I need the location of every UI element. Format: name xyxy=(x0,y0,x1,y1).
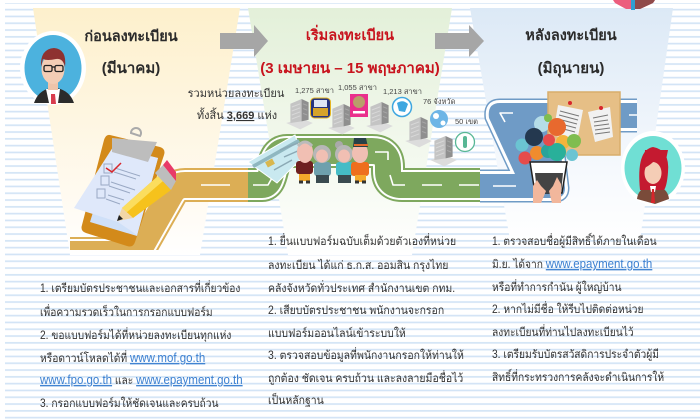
panel: before registration backdrop xyxy=(33,8,240,255)
panel: start registration backdrop xyxy=(248,8,452,255)
person 4 xyxy=(351,138,369,182)
logo: BAAC xyxy=(310,98,330,118)
text block: steps before registration: 1. เตรียมบัตรประชาชนและเอกสารที่เกี่ยวข้อง xyxy=(40,280,240,295)
heading: after registration xyxy=(525,27,617,78)
person 1 xyxy=(296,141,313,182)
text block: steps at start of registration: ลงทะเบียน ได้แก่ ธ.ก.ส. ออมสิน กรุงไทย xyxy=(268,259,448,272)
text block: steps after registration: ลงทะเบียนที่ท่านไปลงทะเบียนไว้ xyxy=(492,324,634,339)
logo: Bangkok xyxy=(456,132,474,152)
icon: man avatar xyxy=(20,31,86,105)
text block: steps after registration: 1. ตรวจสอบชื่อผู้มีสิทธิ์ได้ภายในเดือน xyxy=(492,232,657,248)
person 3 xyxy=(335,141,353,183)
text block: steps after registration: 2. หากไม่มีชื่อ ให้รีบไปติดต่อหน่วย xyxy=(492,301,643,316)
text block: steps after registration xyxy=(492,232,664,384)
text block: steps at start of registration xyxy=(268,232,464,407)
heading: start registration xyxy=(260,24,440,77)
panel: after registration backdrop xyxy=(470,8,673,240)
heading: after registration: (มิถุนายน) xyxy=(538,59,604,78)
text block: steps before registration: www.fpo.go.th และ www.epayment.go.th xyxy=(39,372,243,387)
text block: steps at start of registration: 3. ตรวจสอบข้อมูลที่พนักงานกรอกให้ท่านให้ xyxy=(268,346,464,362)
arrow: first stage to second xyxy=(220,25,268,57)
stat: total registration points: ทั้งสิ้น 3,669 แห่ง xyxy=(197,107,277,122)
text block: steps after registration: 3. เตรียมรับบัตรสวัสดิการประจำตัวผู้มี xyxy=(492,347,659,361)
text block: steps at start of registration: 2. เสียบบัตรประชาชน พนักงานจะกรอก xyxy=(268,304,444,317)
icon: ID card xyxy=(248,135,303,183)
buildings and agency logos xyxy=(286,83,478,166)
text block: steps after registration: หรือที่ทำการกำนัน ผู้ใหญ่บ้าน xyxy=(492,279,622,294)
text block: steps before registration: หรือดาวน์โหลดได้ที่ www.mof.go.th xyxy=(40,350,205,365)
buildings and agency logos: 76 จังหวัด xyxy=(423,97,456,106)
text block: steps at start of registration: ถูกต้อง ชัดเจน ครบถ้วน และลงลายมือชื่อไว้ xyxy=(268,369,463,385)
stat: total registration points xyxy=(188,87,285,122)
stat: total registration points: รวมหน่วยลงทะเบียน xyxy=(188,87,285,100)
decoration: top-right pink tab xyxy=(613,0,655,10)
buildings and agency logos: 50 เขต xyxy=(455,117,478,126)
text block: steps before registration: เพื่อความรวดเร็วในการกรอกแบบฟอร์ม xyxy=(40,304,213,319)
text block: steps after registration: สิทธิ์ที่กระทรวงการคลังจะดำเนินการให้ xyxy=(492,368,664,384)
icon: woman avatar xyxy=(621,131,685,205)
icon: clipboard and pencil xyxy=(74,128,176,246)
heading: start registration: (3 เมษายน – 15 พฤษภาคม) xyxy=(260,60,440,77)
icon: cork board with notes xyxy=(548,92,620,155)
logo: Krungthai xyxy=(392,98,412,116)
text block: steps after registration: มิ.ย. ได้จาก www.epayment.go.th xyxy=(492,256,652,271)
heading: before registration: ก่อนลงทะเบียน xyxy=(84,28,178,45)
heading: before registration: (มีนาคม) xyxy=(102,60,160,77)
text block: steps before registration xyxy=(39,280,243,410)
buildings and agency logos: 1,213 สาขา xyxy=(383,87,422,96)
logo: Government Savings Bank xyxy=(350,94,368,117)
text block: steps before registration: 2. ขอแบบฟอร์มได้ที่หน่วยลงทะเบียนทุกแห่ง xyxy=(40,327,231,342)
heading: before registration xyxy=(84,28,178,77)
buildings and agency logos: 1,275 สาขา xyxy=(295,86,334,95)
text block: steps at start of registration: คลังจังหวัดทั่วประเทศ สำนักงานเขต กทม. xyxy=(268,279,455,295)
icon: group of elderly people xyxy=(296,138,369,183)
text block: steps at start of registration: แบบฟอร์มออนไลน์เข้าระบบให้ xyxy=(268,327,406,340)
icon: laptop with social media bubbles xyxy=(516,114,581,203)
text block: steps at start of registration: 1. ยื่นแบบฟอร์มฉบับเต็มด้วยตัวเองที่หน่วย xyxy=(268,232,456,248)
text block: steps at start of registration: เป็นหลักฐาน xyxy=(268,392,324,407)
heading: after registration: หลังลงทะเบียน xyxy=(525,27,617,44)
buildings and agency logos: 1,055 สาขา xyxy=(338,83,377,92)
heading: start registration: เริ่มลงทะเบียน xyxy=(306,24,394,44)
person 2 xyxy=(313,145,331,183)
road: winding route through three stages xyxy=(70,103,645,254)
logo: Comptroller General xyxy=(430,110,448,128)
arrow: second stage to third xyxy=(435,25,484,57)
text block: steps before registration: 3. กรอกแบบฟอร์มให้ชัดเจนและครบถ้วน xyxy=(40,396,219,410)
